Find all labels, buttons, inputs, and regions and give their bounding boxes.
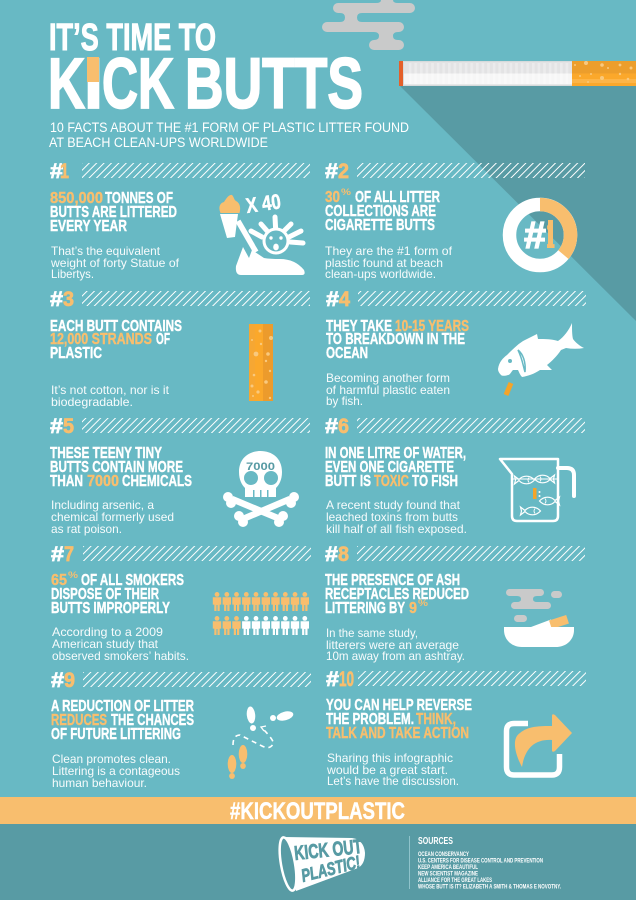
heading: %	[341, 187, 351, 197]
heading	[50, 190, 177, 235]
heading: IN ONE LITRE OF WATER,	[325, 445, 466, 462]
panel: fact 10	[326, 668, 586, 788]
panel: fact 7	[51, 543, 311, 663]
number 8: 8	[338, 543, 349, 566]
heading	[325, 187, 440, 234]
body text: It’s not cotton, nor is it	[51, 383, 170, 397]
icon: statue of liberty x 40	[219, 190, 305, 275]
sources: ALLIANCE FOR THE GREAT LAKES	[418, 877, 492, 884]
number 5	[50, 415, 74, 438]
body text	[52, 625, 189, 663]
body text: would be a great start.	[326, 763, 448, 777]
panel: fact 1	[50, 160, 310, 281]
sources	[418, 836, 561, 890]
icon: footprints	[228, 706, 294, 779]
heading: OF ALL LITTER	[355, 189, 440, 206]
heading: EVEN ONE CIGARETTE	[325, 459, 454, 476]
number 9	[51, 669, 75, 692]
number 5: #	[50, 415, 63, 438]
body text: Including arsenic, a	[51, 498, 154, 512]
body text: biodegradable.	[51, 395, 133, 409]
body text	[326, 626, 465, 663]
heading: 12,000 STRANDS	[50, 331, 152, 348]
icon: ashtray with smoke	[504, 589, 574, 647]
heading: BUTTS ARE LITTERED	[50, 204, 177, 221]
chart: people 65 percent	[213, 592, 309, 635]
heading	[50, 445, 192, 490]
number 8	[325, 543, 349, 566]
icon: fish eating butt	[498, 323, 584, 395]
icon: skull and crossbones	[223, 451, 299, 527]
body text: Littering is a contageous	[52, 764, 180, 778]
title line 2: CK	[102, 45, 174, 124]
title line 2: K	[48, 45, 85, 124]
number 9: 9	[64, 669, 75, 692]
number 1: #	[50, 160, 63, 183]
number 6: 6	[338, 415, 349, 438]
heading: A REDUCTION OF LITTER	[51, 698, 194, 715]
heading: TO BREAKDOWN IN THE	[326, 331, 465, 348]
heading: CHEMICALS	[122, 473, 192, 490]
heading: OF FUTURE LITTERING	[51, 726, 181, 743]
heading: THEY TAKE	[326, 318, 392, 335]
heading: TO FISH	[412, 473, 458, 490]
icon: cigarette filter	[249, 324, 273, 401]
body text: leached toxins from butts	[326, 510, 458, 524]
chart: donut 30 percent: #	[524, 215, 546, 257]
icon: jug of water with fish	[500, 459, 574, 521]
panel: fact 8	[325, 543, 585, 663]
heading: THE PRESENCE OF ASH	[325, 572, 460, 589]
cigarette shadow	[400, 86, 636, 321]
number 4: 4	[339, 288, 350, 311]
number 2	[325, 160, 349, 183]
body text: Sharing this infographic	[327, 751, 453, 765]
chart: donut 30 percent	[510, 204, 571, 266]
heading: OCEAN	[326, 345, 368, 362]
hashtag banner	[0, 797, 636, 825]
body text	[51, 498, 174, 536]
heading: 7000	[87, 473, 119, 490]
number 2: #	[325, 160, 338, 183]
heading: THE PROBLEM.	[326, 711, 414, 728]
number 7: 7	[64, 543, 74, 566]
heading	[50, 318, 182, 362]
body text: According to a 2009	[52, 625, 163, 639]
body text: Let’s have the discussion.	[327, 774, 459, 788]
body text: A recent study found that	[326, 498, 461, 512]
subtitle	[49, 120, 409, 150]
number 8: #	[325, 543, 338, 566]
heading	[51, 698, 194, 743]
body text: chemical formerly used	[51, 510, 174, 524]
body text: observed smokers’ habits.	[52, 649, 189, 663]
heading: TALK AND TAKE ACTION	[326, 725, 469, 742]
title line 2: BUTTS	[185, 45, 363, 124]
subtitle: AT BEACH CLEAN-UPS WORLDWIDE	[49, 135, 268, 150]
heading: 30	[325, 189, 340, 206]
number 3	[50, 288, 74, 311]
heading: THINK,	[416, 711, 456, 728]
panel: fact 4	[326, 288, 586, 408]
number 7: #	[51, 543, 64, 566]
heading	[51, 570, 184, 617]
number 1	[50, 160, 69, 183]
number 3: #	[50, 288, 63, 311]
number 10: #	[326, 668, 339, 691]
body text: kill half of all fish exposed.	[326, 522, 467, 536]
cigarette	[399, 61, 636, 86]
number 4	[326, 288, 350, 311]
panel: fact 2	[325, 160, 585, 281]
heading: 65	[51, 572, 67, 589]
body text: Libertys.	[51, 267, 94, 281]
heading: %	[418, 598, 428, 608]
heading: 9	[409, 600, 417, 617]
footer background	[0, 824, 636, 900]
heading: EACH BUTT CONTAINS	[50, 318, 182, 335]
subtitle: 10 FACTS ABOUT THE #1 FORM OF PLASTIC LITTER FOUND	[50, 120, 409, 135]
body text	[50, 244, 180, 281]
body text: Clean promotes clean.	[52, 752, 171, 766]
number 9: #	[51, 669, 64, 692]
number 5: 5	[63, 415, 74, 438]
body text	[326, 498, 467, 536]
sources: NEW SCIENTIST MAGAZINE	[418, 870, 478, 878]
heading: THAN	[50, 473, 83, 490]
heading: THE CHANCES	[111, 712, 194, 729]
heading: TONNES OF	[105, 190, 173, 207]
heading: BUTTS CONTAIN MORE	[50, 459, 183, 476]
heading: EVERY YEAR	[50, 218, 127, 235]
body text: 10m away from an ashtray.	[326, 649, 465, 663]
panel: fact 9	[51, 669, 311, 790]
number 6	[325, 415, 349, 438]
body text: That’s the equivalent	[51, 244, 161, 258]
heading: DISPOSE OF THEIR	[51, 586, 159, 603]
number 10: 10	[339, 668, 354, 691]
heading: %	[68, 570, 78, 580]
body text: as rat poison.	[51, 522, 122, 536]
logo: kick out plastic cup	[276, 836, 365, 892]
heading: LITTERING BY	[325, 600, 405, 617]
logo: kick out plastic cup: KICK OUT	[293, 836, 363, 865]
number 7	[51, 543, 74, 566]
panel: fact 6	[325, 415, 585, 536]
body text	[52, 752, 180, 790]
body text: litterers were an average	[326, 638, 459, 652]
number 4: #	[326, 288, 339, 311]
number 2: 2	[338, 160, 349, 183]
chart: donut 30 percent: 1	[546, 215, 555, 257]
heading: COLLECTIONS ARE	[325, 203, 436, 220]
icon: skull and crossbones: 7000	[246, 461, 275, 473]
number 6: #	[325, 415, 338, 438]
sources: KEEP AMERICA BEAUTIFUL	[418, 864, 478, 871]
body text	[326, 371, 450, 408]
body text: Becoming another form	[326, 371, 450, 385]
icon: share arrow	[506, 714, 572, 775]
x 40 label: X 40	[244, 190, 282, 218]
body text: of harmful plastic eaten	[326, 383, 450, 397]
body text	[51, 383, 170, 409]
body text: by fish.	[326, 394, 363, 408]
body text: clean-ups worldwide.	[325, 267, 436, 281]
heading: REDUCES	[51, 712, 107, 729]
title line 2: I	[84, 45, 103, 124]
number 3: 3	[63, 288, 74, 311]
body text: They are the #1 form of	[325, 244, 453, 258]
heading	[326, 318, 469, 362]
sources: WHOSE BUTT IS IT? ELIZABETH A SMITH & THOMAS E NOVOTNY.	[418, 884, 561, 890]
number 10	[326, 668, 354, 691]
body text: plastic found at beach	[325, 256, 443, 270]
body text: weight of forty Statue of	[50, 256, 180, 270]
heading: THESE TEENY TINY	[50, 445, 162, 462]
heading: 10-15 YEARS	[395, 318, 469, 335]
heading: YOU CAN HELP REVERSE	[326, 697, 472, 714]
heading: OF	[156, 331, 170, 348]
heading	[325, 572, 469, 617]
body text: human behaviour.	[52, 776, 147, 790]
logo: kick out plastic cup: PLASTIC!	[299, 852, 362, 886]
heading: OF ALL SMOKERS	[81, 572, 184, 589]
body text	[326, 751, 459, 788]
body text	[325, 244, 453, 281]
heading	[326, 697, 472, 742]
heading: PLASTIC	[50, 345, 102, 362]
body text: In the same study,	[326, 626, 418, 640]
hashtag banner: #KICKOUTPLASTIC	[230, 798, 405, 825]
sources: OCEAN CONSERVANCY	[418, 851, 470, 858]
panel: fact 3	[50, 288, 310, 409]
sources: SOURCES	[418, 836, 453, 847]
number 1: 1	[60, 160, 69, 183]
heading	[325, 445, 466, 490]
body text: American study that	[52, 637, 159, 651]
heading: BUTTS IMPROPERLY	[51, 600, 170, 617]
heading: CIGARETTE BUTTS	[325, 217, 435, 234]
sources: U.S. CENTERS FOR DISEASE CONTROL AND PREVENTION	[418, 858, 543, 864]
heading: TOXIC	[374, 473, 409, 490]
panel: fact 5	[50, 415, 310, 536]
heading: BUTT IS	[325, 473, 371, 490]
heading: 850,000	[50, 190, 103, 207]
title	[48, 17, 363, 124]
title line 2	[48, 45, 363, 124]
title line 1: IT’S TIME TO	[49, 17, 216, 59]
heading: RECEPTACLES REDUCED	[325, 586, 469, 603]
smoke	[322, 0, 415, 50]
